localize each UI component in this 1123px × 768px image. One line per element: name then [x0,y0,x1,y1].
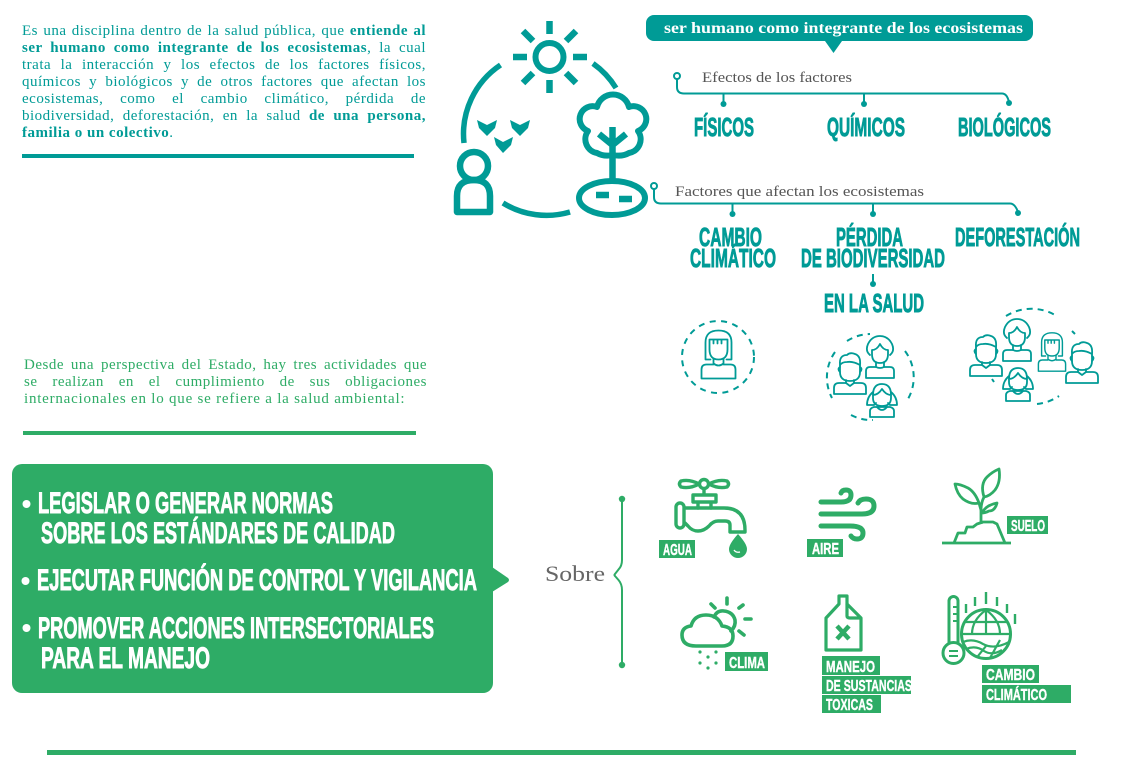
brace [614,496,625,668]
intro paragraph: trata la interacción y los efectos de los factores físicos, [22,57,426,73]
icon: manejo de sustancias tóxicas: MANEJO [826,659,875,676]
bracket: effects [674,73,1012,107]
icon: cambio climático [943,592,1071,704]
action: legislar: LEGISLAR O GENERAR NORMAS [38,487,333,520]
heading: cambio climático: CLIMÁTICO [690,243,776,273]
intro paragraph: biodiversidad, deforestación, en la salud de una persona, [22,108,426,124]
action: legislar: SOBRE LOS ESTÁNDARES DE CALIDAD [41,516,395,550]
label: factors: Factores que afectan los ecosistemas [675,184,924,200]
intro paragraph: Es una disciplina dentro de la salud pública, que entiende al [22,23,426,39]
heading: cambio climático [690,222,776,273]
icon: person [457,152,490,212]
heading: biológicos: BIOLÓGICOS [958,112,1051,142]
icon: tree [579,95,646,215]
icon: suelo: SUELO [1011,518,1045,535]
heading: en la salud: EN LA SALUD [824,288,924,318]
icon: ecosystem cycle [457,21,646,215]
icon: manejo de sustancias tóxicas: TOXICAS [826,697,873,714]
icon: aire [807,490,874,558]
action: promover: PROMOVER ACCIONES INTERSECTORIALES [38,612,434,645]
divider: intro [22,154,414,158]
divider: state [23,431,416,435]
intro paragraph: familia o un colectivo. [22,125,173,141]
action: promover [22,612,434,675]
action: legislar [22,487,395,550]
icon: birds [477,120,530,153]
icon: clima [682,598,768,672]
state paragraph: se realizan en el cumplimiento de sus obligaciones [24,374,427,390]
icon: cambio climático: CLIMÁTICO [986,685,1047,704]
icon: aire: AIRE [812,541,839,558]
icon: individual person [682,321,754,393]
icon: agua [659,480,747,559]
state paragraph [24,357,427,407]
icon: cambio climático: CAMBIO [986,667,1035,684]
header pill [646,15,1033,53]
icon: manejo de sustancias tóxicas: DE SUSTANCIAS [826,678,912,695]
intro paragraph: ecosistemas, como el cambio climático, pérdida de [22,91,426,107]
action: promover: PARA EL MANEJO [41,642,210,675]
divider: bottom [47,750,1076,755]
intro paragraph: ser humano como integrante de los ecosistemas, la cual [22,40,426,56]
panel: actions [12,464,509,693]
heading: químicos: QUÍMICOS [827,112,905,142]
icon: suelo [942,469,1048,543]
action: ejecutar [22,563,477,597]
heading: pérdida de biodiversidad [801,222,945,273]
icon: agua: AGUA [663,542,692,559]
bracket: factors [651,183,1021,217]
label: sobre: Sobre [545,561,605,586]
intro paragraph [22,23,426,141]
action: ejecutar: EJECUTAR FUNCIÓN DE CONTROL Y VIGILANCIA [37,563,477,597]
icon: family [827,334,914,420]
header pill: ser humano como integrante de los ecosistemas [664,20,1023,37]
state paragraph: Desde una perspectiva del Estado, hay tres actividades que [24,357,427,373]
heading: cambio climático: CAMBIO [699,222,762,252]
connector: en la salud [870,274,876,287]
intro paragraph: químicos y biológicos y de otros factores que afectan los [22,74,426,90]
state paragraph: internacionales en lo que se refiere a la salud ambiental: [24,391,405,407]
icon: manejo de sustancias tóxicas [822,596,912,714]
icon: clima: CLIMA [729,655,765,672]
icon: sun [513,21,587,93]
heading: pérdida de biodiversidad: PÉRDIDA [836,222,903,252]
label: effects: Efectos de los factores [702,70,852,86]
heading: pérdida de biodiversidad: DE BIODIVERSIDAD [801,243,945,273]
icon: community [970,309,1098,404]
heading: físicos: FÍSICOS [694,112,754,142]
